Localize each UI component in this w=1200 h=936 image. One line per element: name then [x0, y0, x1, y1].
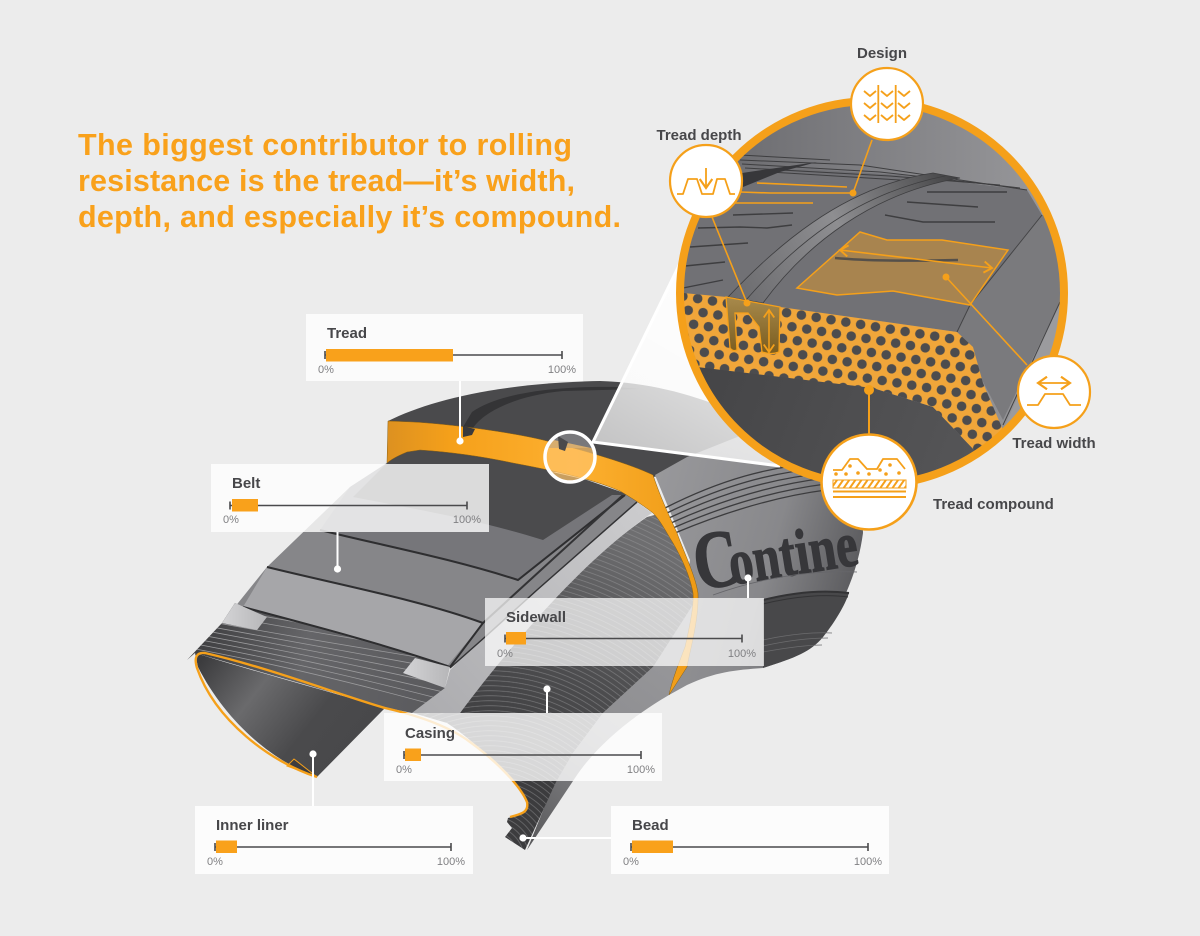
panel: tread: [306, 314, 583, 381]
bead scale: [623, 856, 882, 868]
belt scale: 0%: [223, 514, 239, 526]
inner liner tab: [287, 759, 317, 777]
bead heading: Bead: [632, 817, 669, 834]
connector: bead: [519, 834, 611, 842]
design label: Design: [857, 45, 907, 62]
tread compound label: Tread compound: [933, 496, 1054, 513]
inner liner scale: [207, 856, 465, 868]
sidewall scale: [497, 648, 756, 660]
tread cross-section band: [387, 421, 698, 695]
belt scale: [223, 514, 481, 526]
title: depth, and especially it’s compound.: [78, 200, 621, 234]
title: The biggest contributor to rolling: [78, 128, 572, 162]
lower sidewall: [527, 590, 698, 850]
callout: tread compound: [822, 385, 1054, 530]
casing scale: 100%: [627, 764, 655, 776]
sidewall lower dark zone: [763, 592, 849, 668]
callout: tread width: [942, 274, 1096, 452]
tire cutaway illustration: [187, 247, 863, 860]
tread width leader: [942, 274, 1027, 365]
bead scale: 0%: [623, 856, 639, 868]
casing scale: [396, 764, 655, 776]
casing heading: Casing: [405, 725, 455, 742]
detail: tread width area: [797, 232, 1008, 305]
belt heading: Belt: [232, 475, 260, 492]
sidewall bar: [505, 632, 742, 644]
sidewall scale: 100%: [728, 648, 756, 660]
inner liner scale: 100%: [437, 856, 465, 868]
icon: design: [851, 68, 923, 140]
tread scale: 100%: [548, 364, 576, 376]
tread width label: Tread width: [1012, 435, 1096, 452]
right sidewall: [655, 428, 863, 695]
sidewall heading: Sidewall: [506, 609, 566, 626]
detail: tread depth cut: [726, 297, 780, 354]
detail: main tread face: [820, 170, 1042, 332]
panel: bead: [611, 806, 889, 874]
casing bar: [404, 748, 641, 761]
upper grey layer: [320, 463, 625, 580]
detail: upper tread surface: [738, 106, 1050, 450]
inner liner orange line: [196, 653, 527, 817]
connector: tread: [456, 381, 464, 445]
tread scale: [318, 364, 576, 376]
casing with cords: [414, 515, 693, 850]
icon: tread depth: [670, 145, 742, 217]
belt bar: [230, 499, 467, 512]
tread bar: [325, 349, 562, 362]
detail: compound hexagon section: [680, 293, 1003, 453]
inner liner scale: 0%: [207, 856, 223, 868]
connector: inner liner: [309, 750, 317, 806]
tread heading: Tread: [327, 325, 367, 342]
belt plate: [243, 567, 483, 665]
infographic canvas: [78, 47, 1095, 874]
detail: design lines: [733, 183, 853, 203]
tread scale: 0%: [318, 364, 334, 376]
tread outer surface: [388, 381, 790, 477]
title: [78, 128, 621, 234]
icon: tread width: [1018, 356, 1090, 428]
magnifier wedge: [593, 250, 800, 467]
detail: right shoulder: [957, 215, 1070, 420]
sidewall ribs: [665, 463, 826, 533]
compound leader: [864, 385, 874, 434]
panel: inner liner: [195, 806, 473, 874]
title: resistance is the tread—it’s width,: [78, 164, 575, 198]
icon: tread compound: [822, 434, 916, 530]
belt base layer: [222, 463, 637, 668]
detail: curved central groove: [728, 173, 960, 303]
belt edge strips: [222, 603, 267, 630]
detail: dark groove wedge: [742, 162, 817, 187]
callout: design: [850, 45, 923, 196]
tread groove: [463, 387, 640, 428]
inner liner surface: [195, 653, 385, 777]
inner liner bar: [215, 840, 451, 853]
tread detail circle: [680, 100, 1070, 500]
dark tread underside: [353, 450, 630, 540]
light cap strip: [412, 502, 652, 713]
detail: tread sipes: [683, 192, 1007, 288]
small magnifier circle: [543, 430, 597, 484]
tread depth leader: [712, 217, 750, 306]
sidewall scale: 0%: [497, 648, 513, 660]
belt scale: 100%: [453, 514, 481, 526]
sidewall lettering: Contine: [687, 492, 863, 608]
inner liner heading: Inner liner: [216, 817, 289, 834]
connector: belt: [334, 532, 341, 573]
panel: belt: [211, 464, 489, 532]
panel: sidewall: [485, 598, 764, 666]
detail: dark rubber below compound: [700, 367, 974, 476]
callout: tread depth: [656, 127, 750, 306]
connector: casing: [543, 685, 551, 713]
casing scale: 0%: [396, 764, 412, 776]
bead scale: 100%: [854, 856, 882, 868]
bead bar: [631, 840, 868, 853]
panel: casing: [384, 713, 662, 781]
band notch: [463, 426, 475, 437]
ribbed ply: [187, 603, 448, 713]
connector: sidewall: [744, 574, 752, 598]
detail: top dark lines: [740, 155, 1027, 190]
design leader: [850, 140, 872, 196]
tread depth label: Tread depth: [656, 127, 742, 144]
detail ring: [680, 101, 1064, 485]
